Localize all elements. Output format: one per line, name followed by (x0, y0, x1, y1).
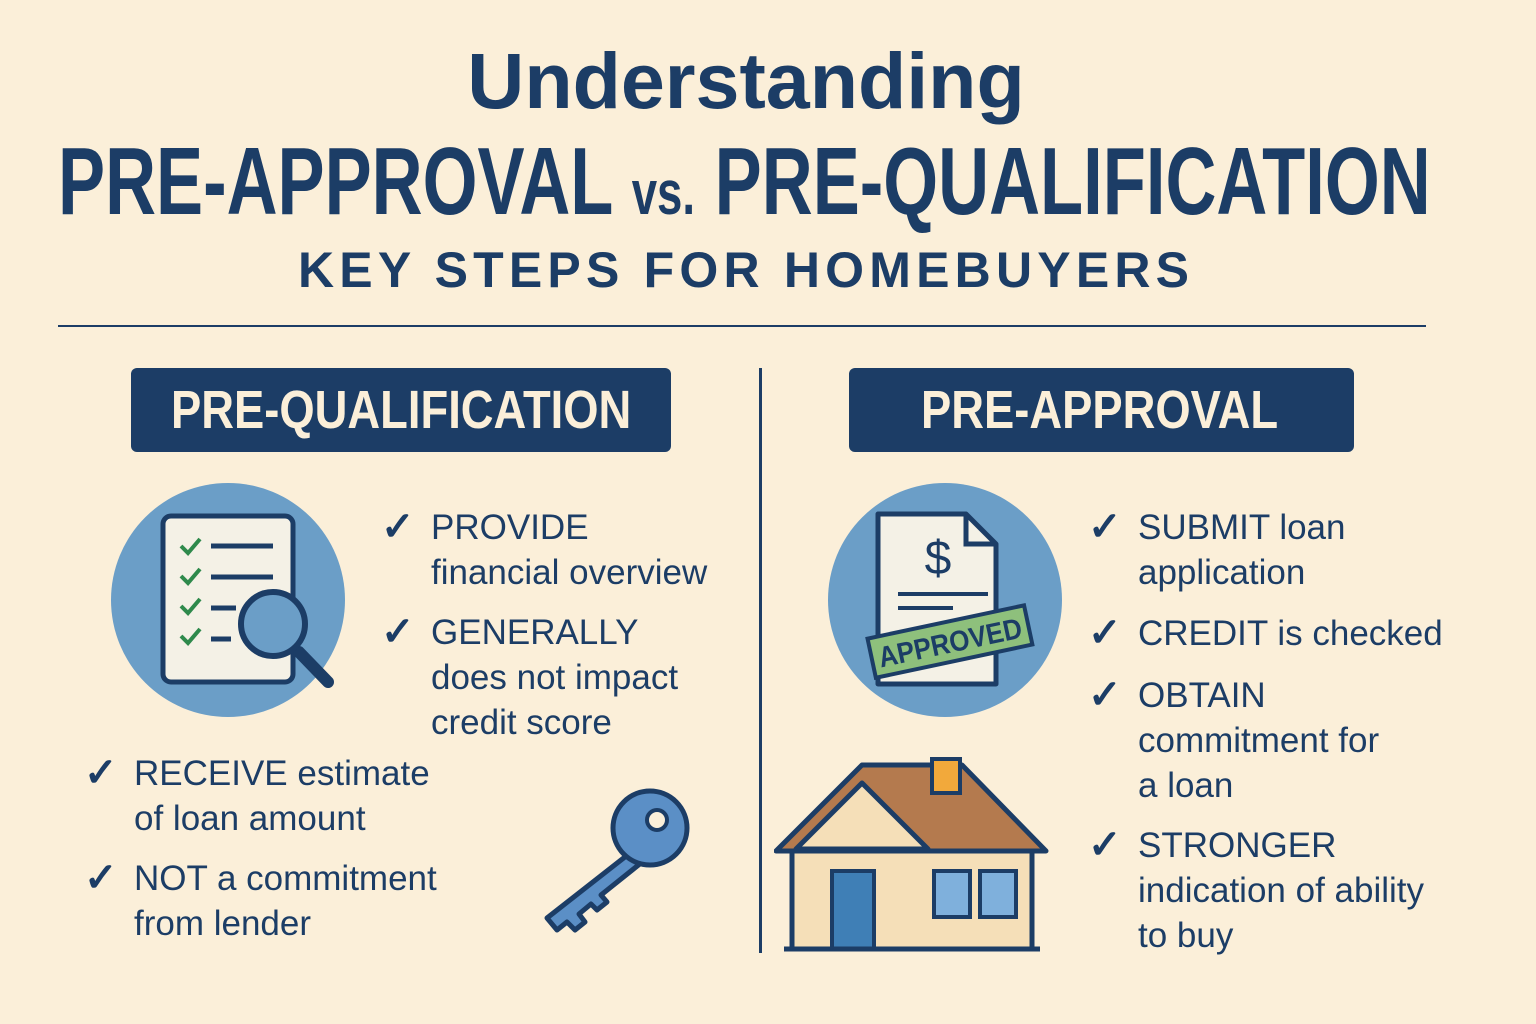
item: obtain: a loan (1138, 766, 1233, 805)
item: provide: financial overview (431, 553, 707, 592)
item: credit: CREDIT is checked (1138, 614, 1443, 653)
item: obtain (1088, 673, 1379, 805)
item: generally: credit score (431, 703, 612, 742)
item: submit: application (1138, 553, 1305, 592)
item: generally: does not impact (431, 658, 678, 697)
panel: pre-approval: ✓ (1088, 823, 1122, 867)
title (58, 36, 1431, 298)
subtitle: KEY STEPS FOR HOMEBUYERS (298, 242, 1194, 298)
panel: pre-qualification: ✓ (84, 856, 118, 900)
item: provide (381, 505, 708, 592)
item: stronger: STRONGER (1138, 826, 1336, 865)
panel: pre-approval: ✓ (1088, 611, 1122, 655)
item: submit: SUBMIT loan (1138, 508, 1346, 547)
item: provide: PROVIDE (431, 508, 589, 547)
icon: checklist with magnifier (111, 483, 345, 717)
item: stronger: to buy (1138, 916, 1233, 955)
title line 1: Understanding (467, 36, 1025, 125)
item: stronger: indication of ability (1138, 871, 1424, 910)
panel: pre-qualification: ✓ (84, 751, 118, 795)
icon: key (544, 788, 690, 933)
item: not a commitment: from lender (134, 904, 311, 943)
icon: approved document: $ (925, 532, 951, 585)
item: stronger (1088, 823, 1424, 955)
item: not a commitment: NOT a commitment (134, 859, 437, 898)
panel: pre-qualification: ✓ (381, 610, 415, 654)
panel: pre-qualification: ✓ (381, 505, 415, 549)
item: generally: GENERALLY (431, 613, 638, 652)
item: obtain: commitment for (1138, 721, 1379, 760)
item: not a commitment (84, 856, 437, 943)
item: receive: of loan amount (134, 799, 366, 838)
title line 2: PRE-APPROVAL vs. PRE-QUALIFICATION (58, 128, 1431, 235)
heading box: PRE-APPROVAL (921, 380, 1278, 440)
heading box: PRE-QUALIFICATION (171, 380, 631, 440)
item: receive (84, 751, 430, 838)
icon: approved document (828, 483, 1062, 717)
heading box (849, 368, 1354, 452)
panel: pre-approval (774, 368, 1443, 955)
item: submit (1088, 505, 1346, 592)
panel: pre-approval: ✓ (1088, 673, 1122, 717)
item: receive: RECEIVE estimate (134, 754, 430, 793)
heading box (131, 368, 671, 452)
item: obtain: OBTAIN (1138, 676, 1266, 715)
panel: pre-qualification (84, 368, 708, 943)
panel: pre-approval: ✓ (1088, 505, 1122, 549)
item: generally (381, 610, 678, 742)
icon: approved document: APPROVED (876, 613, 1025, 674)
icon: house (774, 757, 1048, 952)
